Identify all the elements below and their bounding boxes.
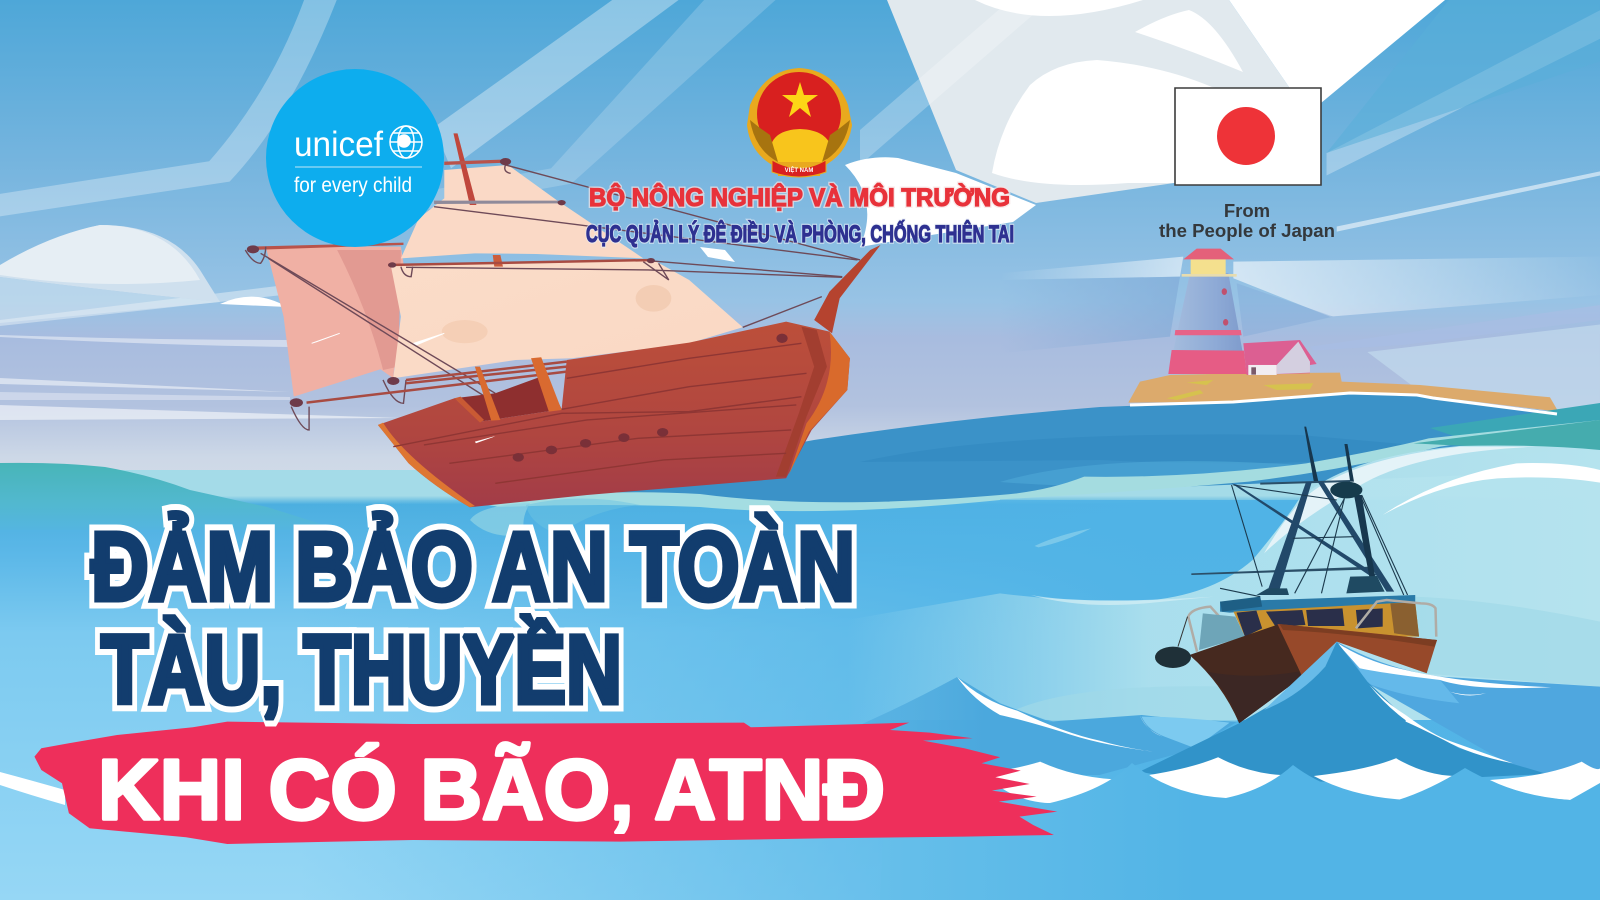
clouds: large white cloud top centre — [700, 0, 1445, 262]
hull — [1189, 624, 1302, 723]
deck recess — [454, 375, 562, 422]
sponsor caption — [1159, 200, 1335, 241]
flag: Japan — [1175, 88, 1321, 185]
waves in front of boat — [985, 642, 1600, 803]
icon: unicef globe — [390, 126, 422, 158]
emblem: Vietnam national emblem: VIỆT NAM — [785, 166, 813, 174]
emblem: Vietnam national emblem — [747, 68, 852, 177]
title: line 3: KHI CÓ BÃO, ATNĐ — [98, 742, 885, 838]
ministry name: BỘ NÔNG NGHIỆP VÀ MÔI TRƯỜNG — [589, 182, 1010, 212]
clouds: left dome — [0, 225, 287, 307]
upper sail — [401, 165, 643, 258]
lighthouse island scene — [1000, 249, 1600, 412]
sponsor caption: the People of Japan — [1159, 220, 1335, 241]
planks — [393, 343, 807, 483]
light beams — [1000, 257, 1600, 353]
far sea — [490, 393, 1600, 505]
sponsor caption: From — [1224, 200, 1270, 221]
title: line 2: TÀU, THUYỀN — [101, 615, 622, 724]
left white wave crest — [0, 772, 65, 805]
left sail — [266, 247, 403, 397]
logo: unicef: for every child — [294, 174, 412, 197]
red brush banner — [34, 722, 1057, 844]
fishing boat — [1155, 427, 1437, 723]
foam strip under sailing ship — [470, 492, 1000, 511]
title: line 2: TÀU, THUYỀN — [101, 615, 622, 724]
sailing ship — [245, 133, 881, 507]
tower — [1168, 273, 1247, 374]
main blue crest — [1140, 642, 1547, 782]
masts and yards — [453, 133, 476, 205]
masts and rigging — [1191, 427, 1408, 597]
cabin — [1233, 603, 1419, 637]
department name — [586, 219, 1014, 248]
white foam crests — [985, 757, 1600, 803]
island — [1128, 373, 1558, 412]
stern edge — [378, 423, 475, 507]
anchor buoy — [1155, 647, 1191, 668]
front water — [880, 763, 1600, 900]
lantern and roof — [1191, 259, 1226, 276]
roof and equipment — [1346, 576, 1385, 593]
rigging — [245, 160, 860, 430]
right wave foam — [1337, 643, 1551, 688]
bow stripe — [789, 332, 850, 475]
background: sky — [0, 0, 1600, 520]
title: line 1: ĐẢM BẢO AN TOÀN — [91, 512, 855, 621]
back waves — [732, 642, 1600, 775]
portholes — [513, 334, 788, 462]
house — [1243, 340, 1317, 375]
railings — [1356, 600, 1436, 637]
logo: unicef: unicef — [294, 125, 383, 164]
department name: CỤC QUẢN LÝ ĐÊ ĐIỀU VÀ PHÒNG, CHỐNG THIÊN TAI — [586, 219, 1014, 248]
main sail — [391, 260, 743, 378]
title: line 1: ĐẢM BẢO AN TOÀN — [91, 512, 855, 621]
sea background — [0, 393, 1600, 900]
horizon wisps — [0, 277, 220, 323]
big pale wave behind fishing boat — [847, 420, 1600, 722]
hull — [378, 322, 850, 507]
teal mound left — [0, 463, 340, 530]
department name: CỤC QUẢN LÝ ĐÊ ĐIỀU VÀ PHÒNG, CHỐNG THIÊN TAI — [586, 219, 1014, 248]
logo: unicef — [266, 69, 444, 247]
bowsprit — [814, 245, 881, 333]
ministry name: BỘ NÔNG NGHIỆP VÀ MÔI TRƯỜNG — [589, 182, 1010, 212]
